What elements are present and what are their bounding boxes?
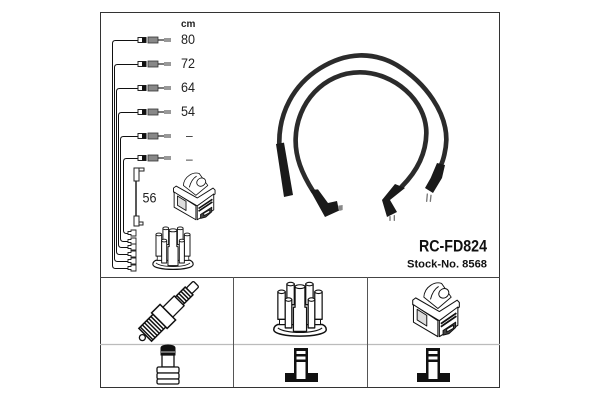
boot: angled left — [310, 189, 339, 217]
icon: distributor cap small — [153, 227, 193, 269]
lead lengths: – — [186, 128, 193, 142]
cable: outer lead — [279, 55, 446, 165]
connectors for each lead — [138, 37, 171, 161]
plug tip: angled right — [390, 216, 394, 220]
panel: distributor cap — [274, 282, 326, 336]
lead lengths: 80 — [181, 31, 195, 47]
wiring diagram: lead routing — [112, 40, 138, 268]
length unit label: cm — [181, 19, 196, 30]
plug tip: straight right — [427, 194, 431, 201]
boot: angled right — [382, 184, 405, 217]
lead terminals — [128, 230, 136, 271]
panel: coil boot type — [417, 348, 450, 382]
lead lengths: 72 — [181, 55, 195, 71]
ignition cable set photo — [276, 55, 446, 220]
lead lengths: 64 — [181, 79, 195, 95]
boot: straight left — [276, 143, 293, 197]
panel: boot type for spark plug — [157, 345, 179, 384]
outer frame — [100, 12, 500, 388]
icon: ignition coil small — [173, 173, 215, 220]
product name: RC-FD824 — [419, 236, 487, 256]
lead lengths: 54 — [181, 103, 195, 119]
lead lengths — [142, 31, 195, 206]
lead lengths: 56 — [142, 190, 157, 206]
boot: straight right — [425, 163, 445, 193]
cable: inner lead — [296, 72, 426, 192]
panel: ignition coil — [413, 283, 459, 337]
lead lengths: – — [186, 152, 193, 166]
stock number: Stock-No. 8568 — [407, 258, 487, 270]
plug tip: angled left — [338, 205, 343, 211]
coil lead drawing — [134, 168, 144, 226]
panel: spark plug — [132, 276, 204, 348]
panel: distributor boot type — [285, 348, 318, 382]
